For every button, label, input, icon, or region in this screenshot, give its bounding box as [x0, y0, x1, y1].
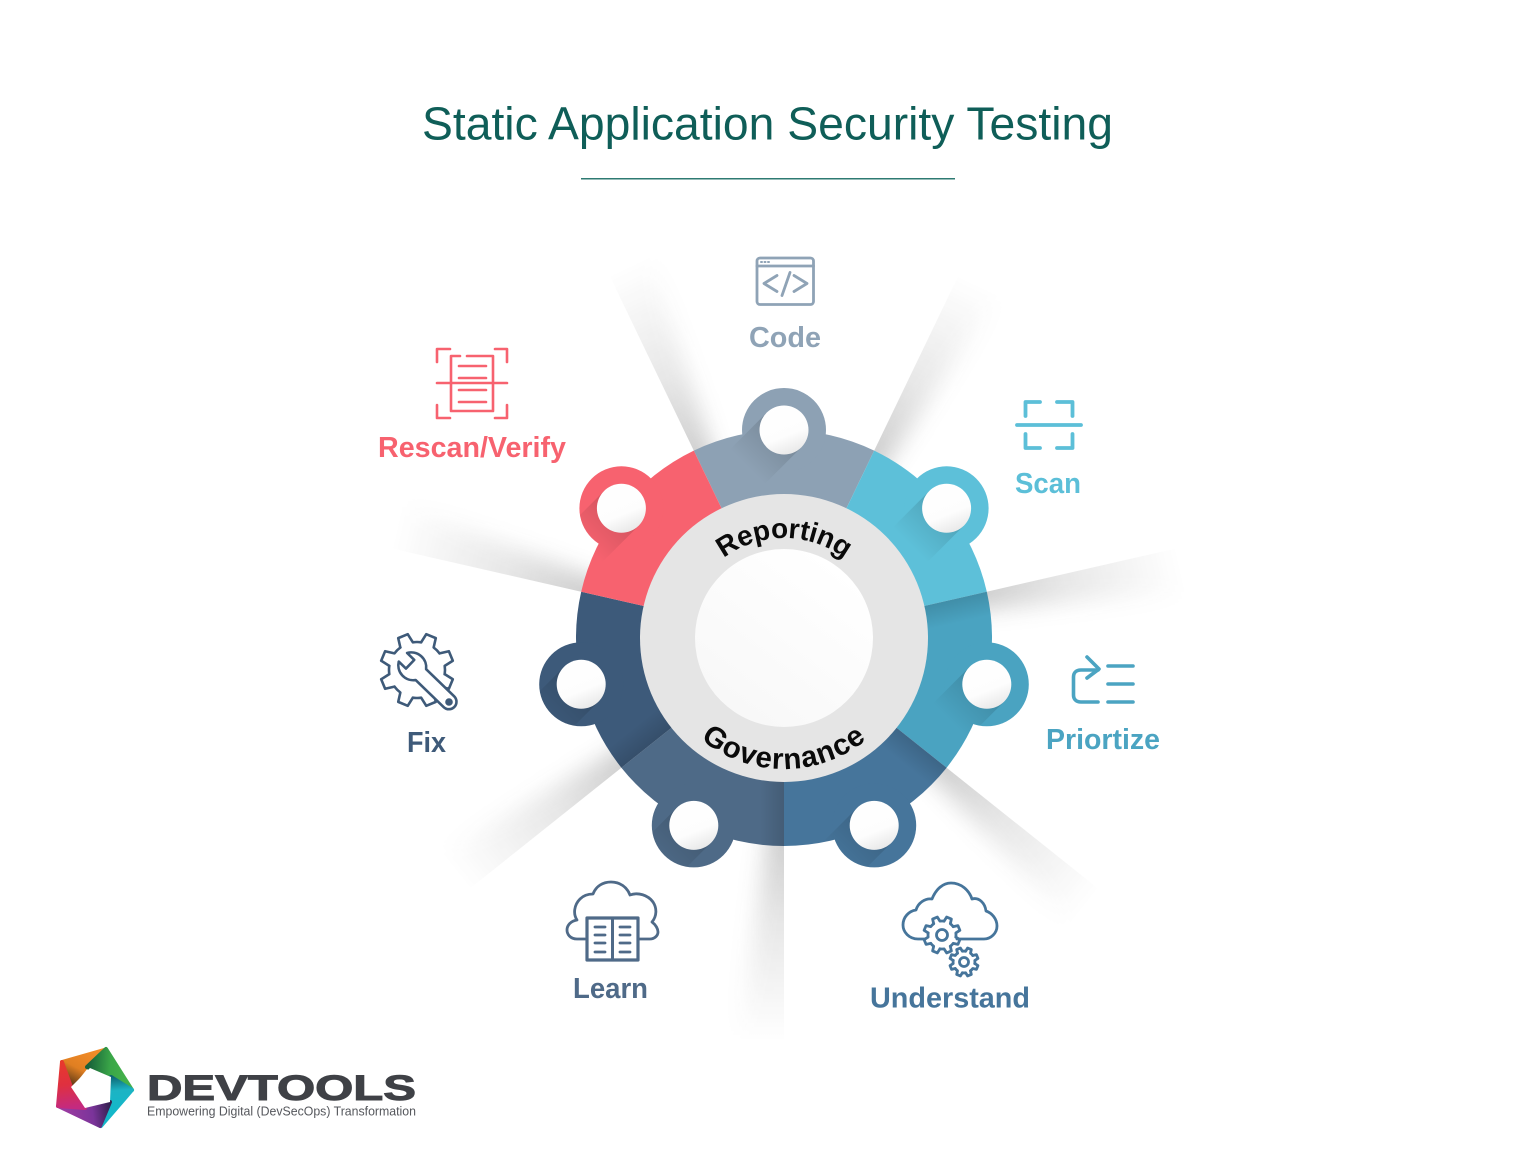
icon: code window [757, 258, 814, 304]
label: Learn: Learn [573, 973, 648, 1005]
grey centre ring [640, 494, 928, 782]
icon: rescan document [437, 349, 507, 418]
segment: Priortize [784, 592, 1029, 768]
ring label: Governance: Governance [704, 726, 864, 770]
segment edge shading [615, 592, 990, 846]
shadow wedges behind the wheel [336, 213, 1232, 1086]
segment: Scan [784, 451, 989, 638]
logo: Devtools [58, 1049, 416, 1126]
segment: Understand [784, 638, 947, 867]
ring label: Reporting: Reporting [715, 522, 852, 560]
segment: Rescan/Verify [579, 451, 784, 638]
label: Code: Code [749, 322, 821, 354]
logo mark [58, 1049, 132, 1126]
segment: Fix [539, 592, 784, 768]
icon: gear and wrench [369, 622, 465, 718]
logo wordmark: DEVTOOLS [147, 1069, 416, 1108]
knob long shadows [527, 413, 1004, 879]
label: Rescan/Verify: Rescan/Verify [378, 432, 566, 464]
label: Scan: Scan [1015, 468, 1081, 500]
label: Understand: Understand [870, 982, 1030, 1014]
segment: Code [694, 388, 874, 638]
logo tagline: Empowering Digital (DevSecOps) Transformation [147, 1104, 416, 1118]
icon: cloud with book [567, 882, 658, 960]
label: Priortize: Priortize [1046, 724, 1160, 756]
logo centre opening [71, 1068, 111, 1108]
title: Static Application Security Testing [422, 98, 1113, 150]
white knobs [557, 406, 1011, 850]
icon: priority list [1074, 657, 1133, 702]
segment: Learn [621, 638, 784, 867]
segmented wheel [539, 388, 1029, 868]
white centre hub [695, 549, 873, 727]
label: Fix: Fix [407, 727, 446, 759]
icon: scan frame [1017, 402, 1081, 448]
icon: cloud with gears [903, 883, 997, 981]
title underline [581, 178, 955, 180]
